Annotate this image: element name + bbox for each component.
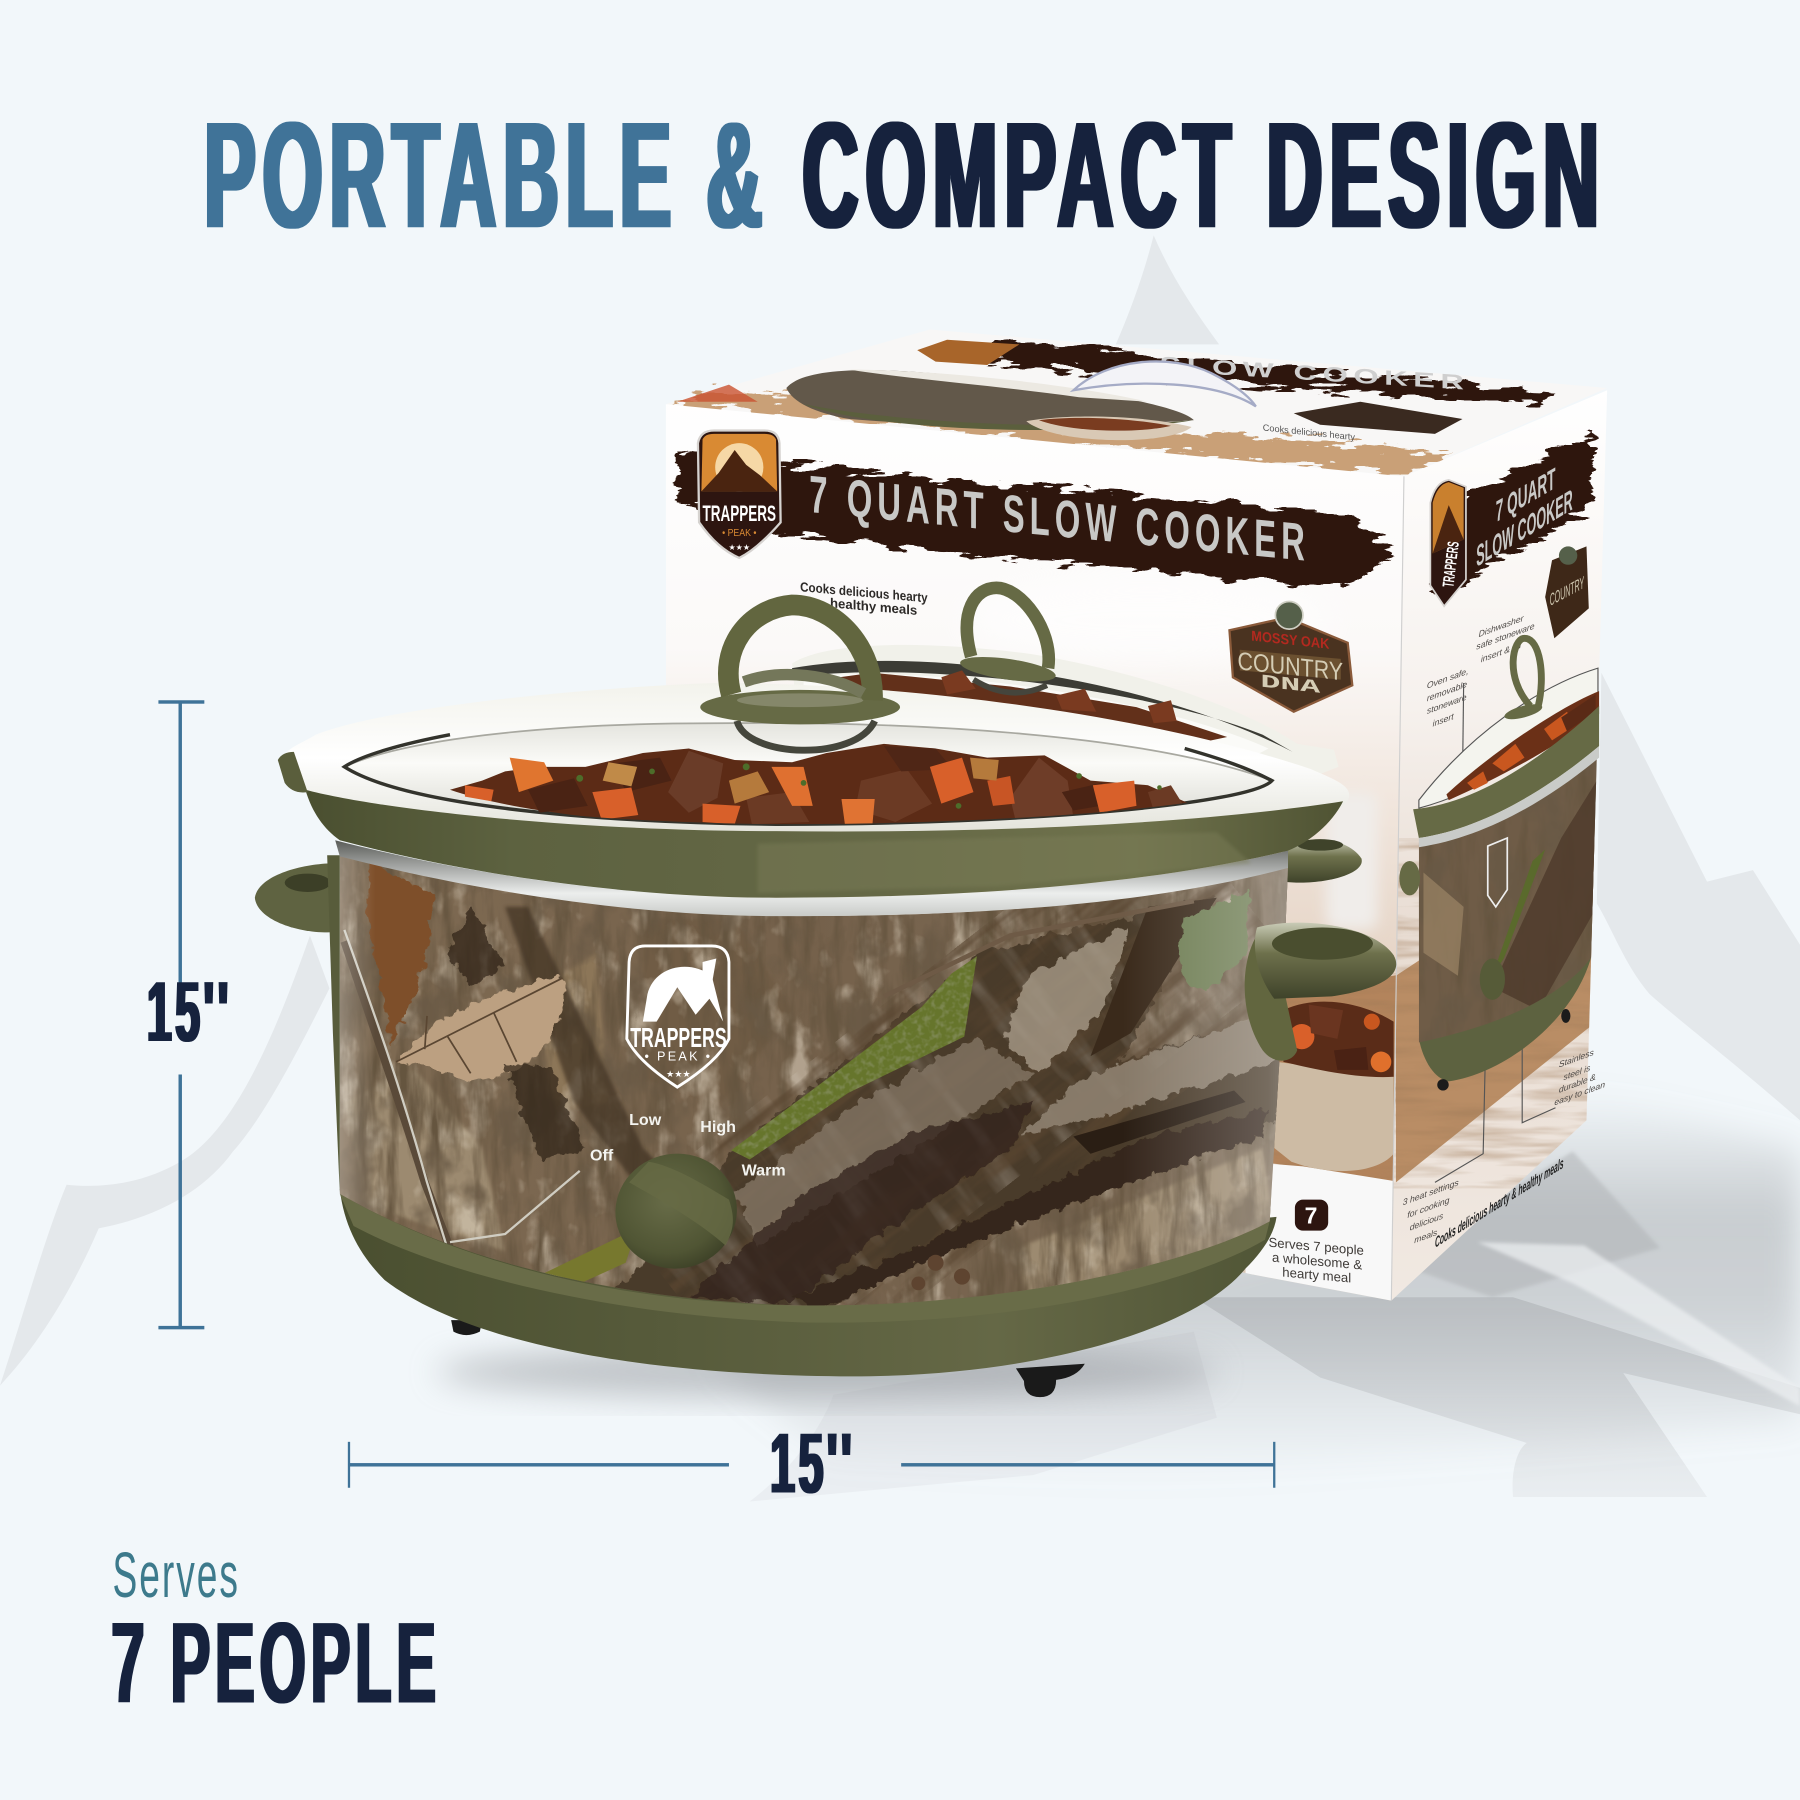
product box — [660, 329, 1607, 1309]
front banner — [677, 450, 1395, 588]
box right face — [1389, 390, 1607, 1301]
control labels: Warm — [742, 1162, 786, 1180]
control labels — [590, 1111, 786, 1180]
top banner — [987, 340, 1555, 404]
rim band — [305, 790, 1343, 898]
side callouts: insert & lid — [1481, 640, 1522, 664]
camo log dark underside — [689, 1102, 1033, 1303]
camo twig — [344, 941, 453, 1257]
camo gloss — [327, 849, 1297, 1320]
mountain ridge: lower centre — [750, 1332, 1217, 1502]
silver band — [335, 840, 1288, 916]
camo dark gap — [448, 907, 585, 1159]
side callouts: delicious — [1410, 1210, 1444, 1233]
food: meat — [528, 746, 1182, 824]
camo bark texture — [327, 849, 1297, 1320]
width left tick — [348, 1442, 350, 1488]
side cooker lid — [1419, 668, 1598, 808]
mountain ridge: lower right — [1194, 1297, 1800, 1497]
lid handle — [700, 605, 900, 750]
box right face: 7 QUART — [1496, 461, 1556, 529]
logo stars: ★★★ — [666, 1069, 691, 1079]
mini bowl — [1026, 417, 1192, 440]
title — [204, 91, 1606, 260]
width dimension — [348, 1442, 1275, 1488]
side cooker camo — [1418, 760, 1597, 1042]
box front badge 7: 7 — [1305, 1203, 1317, 1229]
side wood surface — [1389, 838, 1601, 1188]
lid opening — [344, 723, 1272, 824]
logo peak: • PEAK • — [645, 1050, 712, 1064]
knob — [606, 1144, 746, 1278]
camo log grey bark strip — [735, 1039, 1033, 1246]
height upper line — [179, 701, 182, 987]
cooker shadow — [436, 1344, 1217, 1399]
brand badge — [698, 430, 781, 558]
mossy oak badge: MOSSY OAK — [1251, 629, 1330, 653]
right front handle — [1245, 923, 1396, 1061]
box front bowl — [1274, 1002, 1394, 1171]
camo log light bark — [668, 882, 1264, 1306]
side callouts: durable & — [1559, 1072, 1596, 1095]
food — [450, 744, 1189, 827]
mini badge — [1294, 402, 1462, 434]
cooks text top: Cooks delicious hearty — [1263, 423, 1355, 442]
height label: 15'' — [147, 964, 232, 1059]
mossy oak badge: DNA — [1260, 672, 1322, 699]
serves label: Serves — [113, 1539, 240, 1611]
side callout lines — [1435, 683, 1555, 1182]
control labels: Low — [629, 1111, 662, 1129]
box front serves text: a wholesome & — [1272, 1250, 1362, 1273]
back cooker food — [822, 673, 1227, 742]
brand badge: • PEAK • — [722, 528, 757, 539]
box right face: COUNTRY — [1550, 572, 1584, 610]
box front serves text: Serves 7 people — [1268, 1235, 1364, 1258]
rim left ear — [278, 752, 308, 792]
rim highlight — [758, 832, 1251, 893]
side cooker knob — [1480, 959, 1505, 1000]
height dimension — [158, 700, 204, 1329]
side cooker side handle — [1399, 861, 1420, 895]
side cooker food — [1446, 691, 1599, 800]
side callouts: meals — [1414, 1227, 1438, 1245]
side callouts — [1403, 613, 1605, 1245]
side cooker — [1399, 638, 1601, 1091]
camo dark trunk stripe — [504, 905, 655, 1176]
side callouts: Dishwasher — [1479, 613, 1524, 639]
width right line — [901, 1463, 1274, 1467]
camo tan leaf — [396, 976, 566, 1080]
camo leaf veins — [396, 978, 562, 1073]
camo mottled texture — [340, 871, 1280, 1306]
control labels: Off — [590, 1147, 614, 1165]
box top face — [666, 329, 1607, 476]
brand badge: TRAPPERS — [703, 501, 776, 526]
camo top twig — [884, 901, 1194, 996]
left body edge — [327, 855, 340, 1194]
side callouts: easy to clean — [1554, 1079, 1605, 1107]
camo green leaf — [1180, 890, 1249, 993]
camo moss — [723, 947, 987, 1165]
camo white twig — [344, 930, 580, 1257]
width label: 15'' — [770, 1415, 855, 1510]
white rim and lid — [282, 683, 1349, 834]
side banner — [1435, 434, 1593, 597]
camo bottom moss — [537, 1228, 637, 1291]
box front badge 7 — [1295, 1200, 1328, 1231]
mountain ridge: left — [0, 936, 329, 1386]
logo mountain — [643, 967, 723, 1022]
mossy oak badge: COUNTRY — [1238, 647, 1343, 686]
height bottom tick — [158, 1326, 204, 1329]
handle vertical mount — [1245, 928, 1297, 1061]
front tagline second line: healthy meals — [830, 595, 917, 618]
white lower panel — [1246, 1164, 1393, 1300]
side callouts: Stainless — [1559, 1047, 1594, 1070]
lid handle bar — [744, 675, 863, 693]
side cooker handle — [1513, 638, 1541, 706]
camo light bark patch — [1004, 924, 1131, 1073]
side callouts: steel is — [1564, 1063, 1591, 1082]
height lower line — [179, 1074, 182, 1327]
mossy oak badge — [1229, 602, 1352, 712]
top banner text: SLOW COOKER — [1159, 353, 1469, 395]
camo acorns — [911, 1255, 970, 1290]
side callouts: stoneware — [1427, 692, 1467, 716]
background mountain watermark — [0, 235, 1800, 1502]
main slow cooker — [255, 605, 1396, 1414]
mountain ridge: right — [1597, 673, 1800, 1120]
side mossy badge — [1545, 546, 1589, 638]
cooker base lip — [340, 1194, 1270, 1323]
back cooker on box — [792, 588, 1339, 783]
cooker feet — [451, 1320, 1085, 1397]
box right face: Cooks delicious hearty & healthy meals — [1435, 1155, 1564, 1251]
lid opening dark edge — [344, 735, 1272, 824]
box edges — [1391, 476, 1404, 1301]
side cooker rim — [1413, 706, 1599, 838]
side brand badge — [1430, 480, 1466, 606]
lid handle base — [700, 690, 900, 724]
logo shield — [627, 946, 729, 1087]
mountain peak: centre — [1116, 235, 1219, 344]
cooker base — [340, 1189, 1277, 1376]
control labels: High — [700, 1118, 736, 1136]
width left line — [349, 1463, 729, 1467]
title part: portable: PORTABLE & — [204, 91, 769, 260]
serves value: 7 PEOPLE — [111, 1599, 441, 1727]
back cooker lid handle — [959, 588, 1057, 693]
box front serves text — [1268, 1235, 1364, 1286]
back cooker lid — [792, 645, 1339, 783]
food: onion — [603, 758, 999, 804]
front banner text: 7 QUART SLOW COOKER — [809, 465, 1310, 573]
floor shadow — [712, 1091, 1800, 1481]
side cooker logo — [1488, 838, 1507, 907]
box front face — [660, 390, 1406, 1309]
lid handle reflection — [737, 721, 875, 750]
camo dark knot — [1091, 898, 1217, 1056]
side cooker base — [1419, 957, 1591, 1081]
cooker body camo — [340, 856, 1288, 1306]
food: herbs — [576, 763, 1162, 809]
side callouts: 3 heat settings — [1403, 1177, 1459, 1207]
mini cooker on top — [786, 370, 1194, 425]
camo dark mottling — [327, 849, 1297, 1320]
box right face: SLOW COOKER — [1476, 482, 1573, 574]
brand badge: ★★★ — [729, 543, 750, 552]
mini handle — [1073, 361, 1256, 406]
side brand badge: TRAPPERS — [1439, 540, 1463, 588]
side callouts: for cooking — [1407, 1195, 1450, 1220]
left handle — [255, 863, 335, 932]
height top tick — [158, 700, 204, 704]
camo pale patches — [344, 918, 1274, 1309]
side callouts: removable — [1427, 679, 1467, 703]
logo eagle — [703, 959, 716, 987]
wood surface — [1273, 975, 1396, 1181]
front tagline: Cooks delicious hearty — [800, 579, 928, 605]
cooker logo — [627, 946, 729, 1087]
food: carrots — [465, 758, 1136, 824]
side callouts: safe stoneware — [1476, 621, 1535, 652]
side callouts: insert — [1433, 711, 1454, 729]
width right tick — [1273, 1442, 1275, 1488]
camo main log — [597, 895, 1280, 1314]
back right handle — [1283, 839, 1362, 883]
lid handle arc — [728, 605, 873, 700]
logo trappers: TRAPPERS — [630, 1022, 727, 1053]
camo orange leaf — [367, 861, 434, 1045]
side callouts: Oven safe, — [1427, 666, 1468, 691]
box front serves text: hearty meal — [1282, 1265, 1351, 1286]
